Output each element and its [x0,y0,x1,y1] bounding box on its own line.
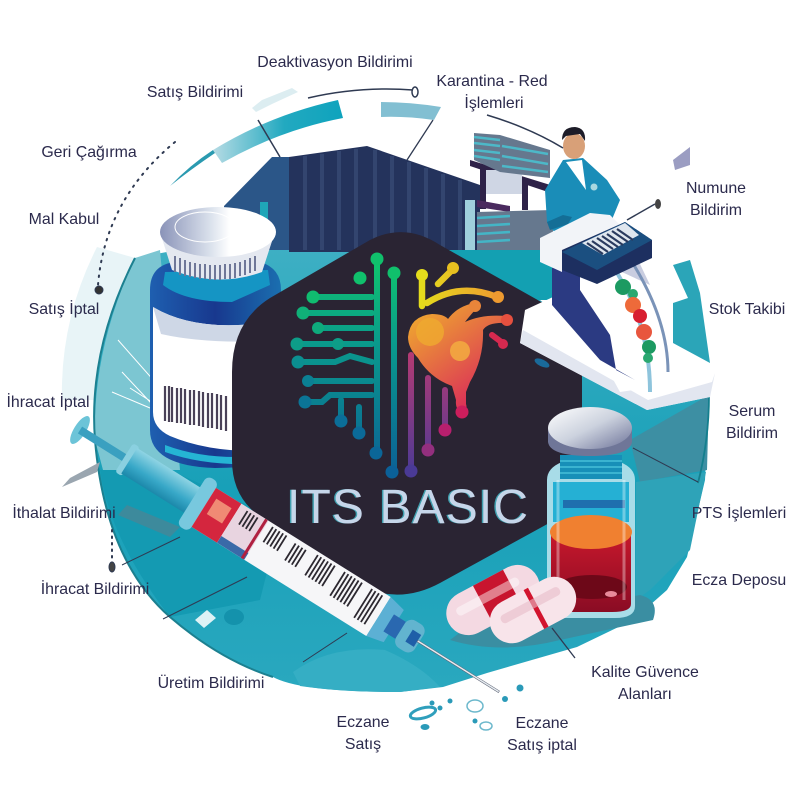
logo: circuit heart [290,252,513,478]
yellow veins [416,262,504,306]
heart [408,304,506,412]
labels: Deaktivasyon Bildirimi [257,54,413,71]
labels: İhracat İptal [6,392,90,411]
labels: İhracat Bildirimi [41,579,149,598]
labels: Numune [686,180,746,197]
labels: Satış İptal [29,299,99,318]
logo wordmark: ITS BASIC [286,481,526,534]
pill bottle [150,207,281,468]
labels: İthalat Bildirimi [12,503,116,522]
capsules [439,557,584,651]
labels: PTS İşlemleri [692,503,786,522]
logo wordmark: ITS BASIC [287,481,528,534]
pharmacist [545,127,620,240]
syringe barrel label [192,488,391,636]
circuit traces [290,252,400,478]
labels: Bildirim [726,425,778,442]
labels: Eczane [515,715,569,732]
logo hexagon [232,232,582,595]
labels: Mal Kabul [29,211,99,228]
bottle barcode [163,385,232,432]
labels: Satış iptal [507,737,577,754]
labels: Alanları [618,686,672,703]
barcode on scanner [582,223,639,255]
barcode scanner machine [520,213,715,410]
water droplets [409,684,524,730]
labels: Eczane [336,714,390,731]
bottle cap [160,207,276,280]
labels: Satış Bildirimi [147,84,243,101]
labels: Karantina - Red [436,73,548,90]
labels: Satış [345,736,381,753]
connector lines and pins [95,87,698,662]
shelves and stacks [447,133,560,300]
labels: İşlemleri [464,93,524,112]
labels: Bildirim [690,202,742,219]
top arc segments [170,88,690,186]
labels: Kalite Güvence [591,664,699,681]
syringe [60,402,514,716]
medicine vial [547,407,635,618]
labels: Serum [729,403,775,420]
purple drips [404,355,452,478]
teal background disc [62,240,709,692]
labels: Üretim Bildirimi [158,674,264,692]
labels: Ecza Deposu [692,572,786,589]
labels: Geri Çağırma [41,144,137,161]
labels: Stok Takibi [709,301,785,318]
warehouse [224,146,480,252]
